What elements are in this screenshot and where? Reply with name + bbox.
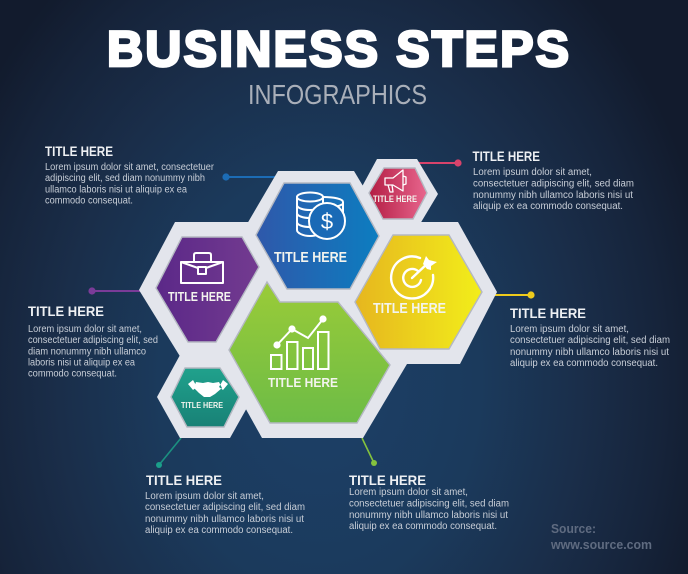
source note: www.source.com [550, 538, 652, 552]
panel: pink hexagon [369, 168, 427, 219]
connector: purple [88, 287, 142, 295]
panel: blue hexagon: TITLE HERE [274, 249, 347, 266]
panel: teal hexagon: TITLE HERE [181, 401, 224, 410]
text block: bottom center: nonummy nibh ullamco laboris nisi ut [349, 510, 508, 521]
text block: top right: TITLE HERE [472, 148, 540, 164]
text block: right [510, 305, 670, 369]
text block: top right: Lorem ipsum dolor sit amet, [473, 167, 592, 178]
connector: green [362, 438, 377, 466]
source note [550, 522, 652, 552]
text block: top right: aliquip ex ea commodo consequat. [473, 201, 623, 212]
panel: teal hexagon [171, 368, 239, 427]
text block: bottom left: nonummy nibh ullamco laboris nisi ut [145, 514, 304, 525]
panel: yellow hexagon: TITLE HERE [373, 300, 446, 317]
text block: left: Lorem ipsum dolor sit amet, [28, 324, 142, 335]
text block: right: consectetuer adipiscing elit, sed diam [510, 335, 670, 346]
icon: megaphone [385, 170, 406, 192]
panel: green hexagon [229, 282, 390, 423]
icon: target [391, 256, 437, 298]
text block: left: TITLE HERE [28, 303, 104, 319]
text block: bottom center: consectetuer adipiscing elit, sed diam [349, 498, 509, 510]
text block: top left: Lorem ipsum dolor sit amet, consectetuer [45, 162, 215, 173]
text block: right: nonummy nibh ullamco laboris nisi ut [510, 347, 669, 358]
text block: top right: nonummy nibh ullamco laboris nisi ut [473, 190, 633, 201]
panel: yellow hexagon [355, 235, 482, 349]
icon: growth chart [271, 315, 328, 369]
text block: left: laboris nisi ut aliquip ex ea [28, 358, 135, 368]
text block: right: TITLE HERE [510, 305, 586, 321]
icon: briefcase [181, 253, 223, 283]
text block: bottom center: Lorem ipsum dolor sit amet, [349, 487, 468, 498]
text block: right: aliquip ex ea commodo consequat. [510, 358, 658, 369]
text block: left: commodo consequat. [28, 368, 117, 380]
connector: teal [156, 438, 181, 468]
hexagon frame [139, 159, 497, 438]
text block: top left: ullamco laboris nisi ut aliquip ex ea [45, 184, 187, 196]
panel: purple hexagon [156, 237, 259, 342]
text block: bottom left: aliquip ex ea commodo consequat. [145, 525, 293, 536]
text block: bottom left: consectetuer adipiscing elit, sed diam [145, 502, 305, 513]
text block: bottom left: TITLE HERE [146, 472, 222, 488]
panel: purple hexagon: TITLE HERE [168, 289, 231, 304]
text block: left: consectetuer adipiscing elit, sed [28, 335, 158, 346]
icon: coins: $ [321, 209, 333, 234]
connector: yellow [495, 291, 535, 299]
connector: pink [418, 159, 462, 167]
panel: blue hexagon [256, 183, 379, 289]
icon: handshake [188, 380, 228, 397]
source note: Source: [551, 522, 596, 536]
text block: left [28, 303, 158, 380]
text block: bottom center: TITLE HERE [349, 472, 426, 488]
subtitle: INFOGRAPHICS [248, 79, 427, 110]
text block: bottom left [145, 472, 305, 536]
connector: blue [222, 173, 278, 181]
text block: bottom left: Lorem ipsum dolor sit amet, [145, 491, 264, 502]
text block: bottom center [349, 472, 509, 532]
text block: top left: adipiscing elit, sed diam nonummy nibh [45, 173, 205, 184]
text block: top left: TITLE HERE [45, 143, 113, 159]
text block: left: diam nonummy nibh ullamco [28, 346, 146, 358]
panel: green hexagon: TITLE HERE [268, 375, 338, 390]
text block: bottom center: aliquip ex ea commodo consequat. [349, 521, 497, 532]
text block: right: Lorem ipsum dolor sit amet, [510, 324, 629, 335]
text block: top left: commodo consequat. [45, 196, 133, 206]
panel: pink hexagon: TITLE HERE [373, 194, 417, 205]
text block: top right: consectetuer adipiscing elit, sed diam [473, 178, 634, 190]
text block: top left [45, 143, 215, 206]
title: BUSINESS STEPS [107, 21, 569, 77]
text block: top right [472, 148, 634, 212]
